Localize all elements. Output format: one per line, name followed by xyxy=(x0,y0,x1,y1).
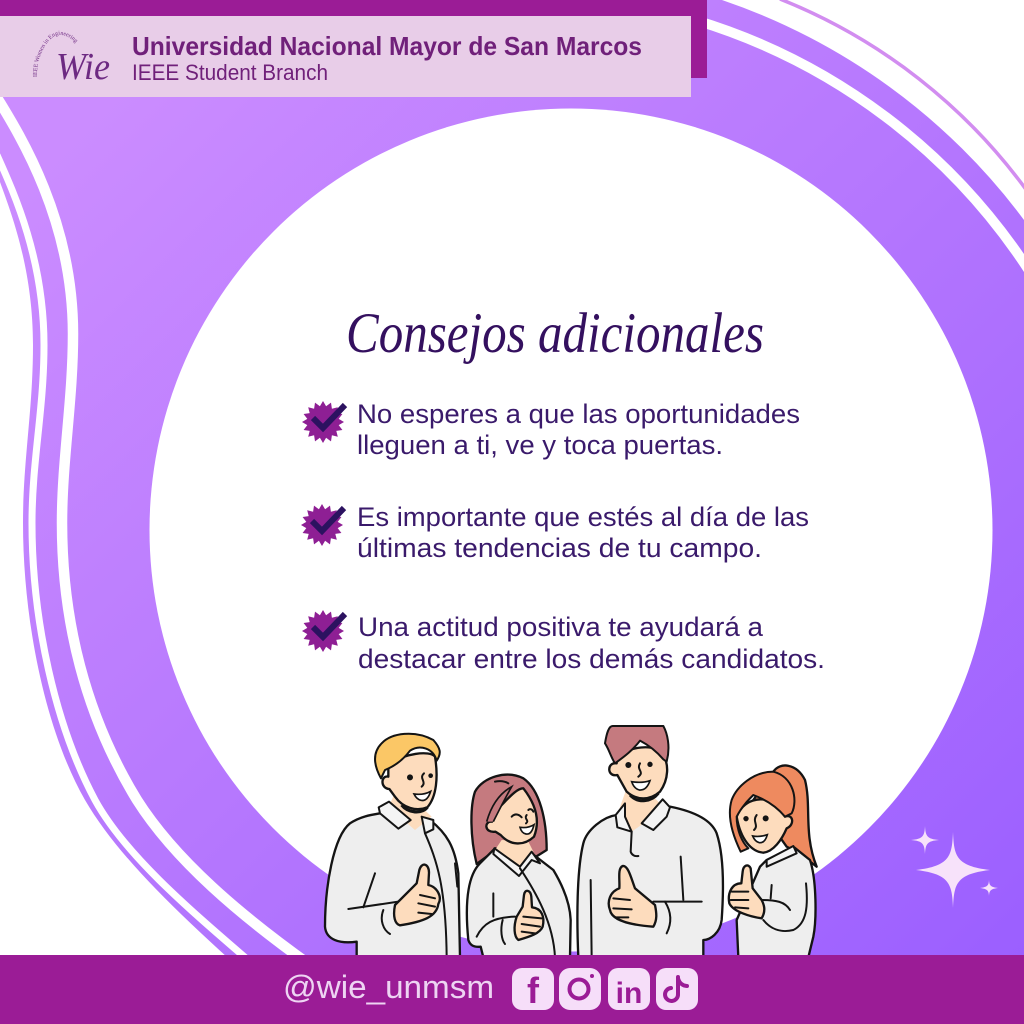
header banner xyxy=(0,0,707,97)
icon: linkedin: in xyxy=(616,977,642,1010)
icon: check badge xyxy=(302,610,345,652)
icon: check badge xyxy=(301,504,344,546)
person: tall man xyxy=(577,726,723,957)
icon: facebook: f xyxy=(527,970,540,1011)
inner white stripe left xyxy=(0,155,255,966)
tip 2 text: Es importante que estés al día de las xyxy=(357,502,809,532)
tip 3 text: destacar entre los demás candidatos. xyxy=(358,644,825,674)
white stripe upper right xyxy=(695,20,1024,272)
tip 1 text: No esperes a que las oportunidades xyxy=(357,399,800,429)
tip 1 text: lleguen a ti, ve y toca puertas. xyxy=(357,430,723,460)
tip 3 text: Una actitud positiva te ayudará a xyxy=(358,612,764,642)
logo: WIE: IEEE Women in Engineering xyxy=(32,30,78,77)
title: Consejos adicionales xyxy=(346,302,764,365)
tip 1 xyxy=(302,399,800,460)
person: woman with orange ponytail xyxy=(729,765,817,957)
logo: WIE: Wie xyxy=(56,46,110,88)
sparkles xyxy=(911,826,998,908)
icon: check badge xyxy=(302,401,345,443)
icon: linkedin xyxy=(608,968,650,1010)
social handle: @wie_unmsm xyxy=(283,969,494,1005)
icon: instagram xyxy=(559,968,601,1010)
person: blond man xyxy=(325,734,460,957)
illustration: four people thumbs up xyxy=(325,726,817,957)
outer white stripe left xyxy=(0,96,310,965)
thin lilac stripe upper right xyxy=(780,0,1024,195)
header title: Universidad Nacional Mayor de San Marcos xyxy=(132,31,642,61)
logo: WIE xyxy=(32,30,110,88)
icon: facebook xyxy=(512,968,554,1011)
icon: tiktok xyxy=(656,968,698,1010)
footer bar xyxy=(0,955,1024,1024)
person: woman with rose hair xyxy=(467,775,571,957)
tip 2 xyxy=(301,502,809,563)
tip 3 xyxy=(302,610,825,674)
header subtitle: IEEE Student Branch xyxy=(132,60,328,85)
white central circle xyxy=(150,108,992,952)
tip 2 text: últimas tendencias de tu campo. xyxy=(357,533,762,563)
